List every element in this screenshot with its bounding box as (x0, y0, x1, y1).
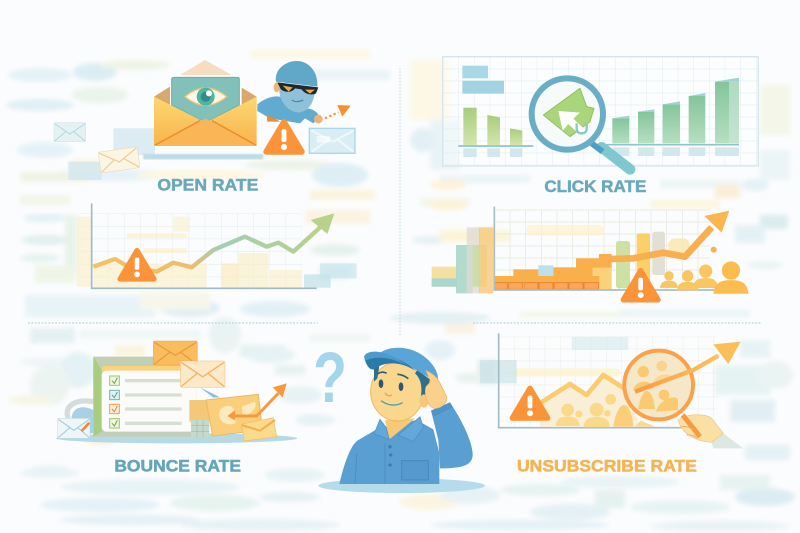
magnifying glass with cursor (532, 78, 630, 169)
panel: open rate (54, 60, 357, 289)
panel: unsubscribe rate (480, 333, 743, 475)
dotted divider: left horizontal (28, 322, 318, 324)
warning icon (266, 122, 302, 152)
bounced parcels and arrow (189, 383, 287, 441)
chart with audience and magnifier (480, 333, 743, 448)
dotted divider: vertical (399, 68, 401, 335)
dotted divider: right horizontal (473, 322, 762, 324)
envelope with eye (143, 60, 263, 159)
envelopes (58, 341, 225, 438)
small envelope right (309, 128, 355, 153)
panel: click rate (432, 57, 758, 300)
bar and brick chart with audience (432, 207, 748, 300)
unsubscribe rate heading: UNSUBSCRIBE RATE (517, 456, 697, 475)
open rate heading: OPEN RATE (157, 176, 258, 195)
question mark: ? (313, 338, 347, 418)
bar chart: click rate (443, 57, 758, 166)
bounce rate heading: BOUNCE RATE (114, 456, 241, 475)
small envelopes left (54, 123, 155, 180)
click rate heading: CLICK RATE (544, 177, 646, 196)
checklist window (56, 357, 297, 443)
spy character (257, 61, 351, 123)
panel: bounce rate (56, 341, 297, 475)
line chart: open rate (77, 203, 357, 289)
character: thinking man (318, 348, 485, 493)
